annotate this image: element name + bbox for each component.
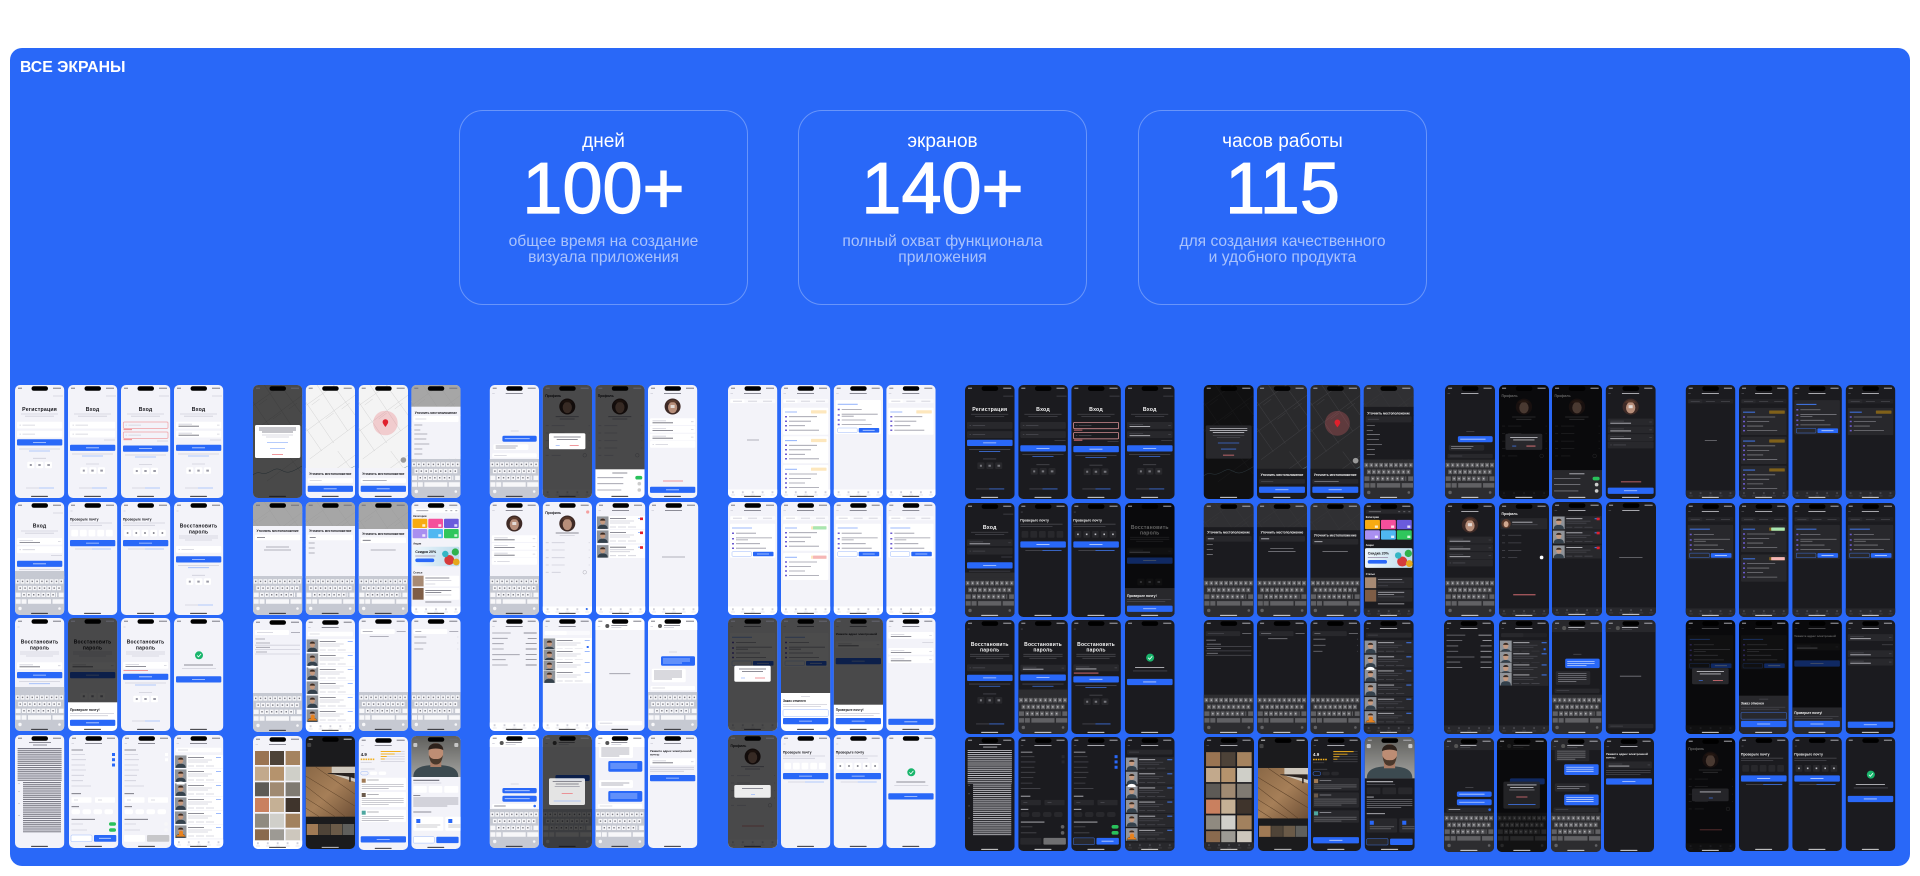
screen: profile: [1499, 503, 1549, 617]
screen: password dialog: [1686, 738, 1735, 852]
screen: login filled: [1125, 385, 1175, 499]
screen: email sheet: [1792, 620, 1842, 735]
screen group: light profile and chat screens: [490, 385, 698, 848]
screen: login keyboard: [965, 503, 1015, 617]
screen: orders empty: [1686, 385, 1735, 499]
screen: otp filled: [834, 735, 883, 848]
screen: orders list: [1739, 385, 1789, 499]
screen: gallery: [253, 736, 302, 849]
screen: restore keyboard: [15, 618, 64, 731]
screen: messages: [1499, 620, 1549, 734]
screen: master profile: [1365, 737, 1415, 851]
stat card: days: визуала приложения: [528, 249, 679, 266]
screen: masters list: [174, 735, 223, 848]
screen: master profile: [411, 736, 461, 849]
stat card: screens: [798, 110, 1087, 305]
screen: edit profile: [1606, 385, 1656, 499]
screen: login error: [1071, 385, 1121, 499]
screen: restore sheet: [1125, 503, 1175, 617]
screen: registration: [15, 385, 64, 498]
stat card: days: 100+: [522, 149, 685, 229]
screen: location suggestions: [304, 500, 364, 615]
screen: otp filled: [121, 502, 170, 615]
stat card: work hours: 115: [1225, 149, 1340, 229]
screen group: light orders screens: [728, 385, 936, 848]
screen: home: [411, 502, 461, 615]
screen: cancel dialog: [1686, 620, 1735, 734]
screen: email sheet: [834, 618, 883, 732]
screen: restore keyboard: [1018, 620, 1068, 734]
screen: chat conversation: [1552, 620, 1602, 734]
stat card: screens: приложения: [898, 249, 987, 266]
screen: order actions variant: [1792, 503, 1842, 617]
screen: restore sheet: [68, 618, 117, 731]
screen: search empty: [1257, 620, 1307, 734]
screen: change email: [648, 735, 697, 848]
screen: location suggestions: [1202, 501, 1263, 617]
screen: order actions variant: [886, 502, 936, 615]
screen: edit keyboard: [490, 502, 539, 615]
screen: home: [1364, 503, 1414, 617]
stat card: days: общее время на создание: [509, 233, 698, 250]
screen: reviews: [359, 737, 408, 850]
screen: change password: [1846, 620, 1895, 734]
screen: favourites: [1552, 502, 1602, 616]
screen: restore password: [174, 502, 223, 615]
screen: search recent: [253, 619, 302, 732]
screen: privacy policy: [15, 735, 64, 848]
screen: search recent: [1204, 620, 1254, 734]
screen: change email: [1604, 738, 1654, 852]
screen: location not found: [251, 500, 311, 615]
stat card: work hours: часов работы: [1222, 131, 1343, 152]
screen: location dialog: [1202, 383, 1263, 499]
screen: chat typing: [1444, 738, 1494, 852]
screen: map pin: [357, 383, 417, 498]
screen: gallery: [1204, 737, 1254, 851]
screen: photo viewer: [1258, 737, 1308, 851]
screen: chat keyboard: [490, 385, 539, 498]
screen: chat empty: [1606, 620, 1656, 734]
screen: map pin: [1308, 383, 1369, 499]
screen: restore error: [121, 618, 170, 731]
screen: notifications sheet: [595, 385, 645, 498]
screen: login: [68, 385, 117, 498]
screen: search empty: [359, 618, 408, 731]
screen: password dialog: [728, 735, 777, 848]
screen: masters: [1364, 620, 1414, 734]
screen: favourites: [596, 502, 645, 615]
screen: reviews: [1311, 737, 1361, 851]
stat card: screens: экранов: [907, 131, 978, 152]
screen: restore password: [965, 620, 1015, 734]
screen: search hints: [411, 618, 461, 731]
screen: one order: [886, 385, 936, 498]
screen: filters reset: [1018, 737, 1068, 851]
screen: chat keyboard: [1445, 385, 1495, 499]
screen: profile: [543, 502, 592, 615]
screen: order actions variant: [834, 502, 883, 615]
screen: long chat: [595, 735, 645, 848]
screen: map: [304, 383, 364, 498]
screen: orders mixed: [781, 502, 830, 615]
screen: chat empty: [595, 618, 645, 731]
screen: location list: [1362, 383, 1423, 499]
screen: chat typing: [490, 735, 539, 848]
screens gallery: [15, 385, 1896, 852]
stat card: days: [459, 110, 748, 305]
screen: messages: [543, 618, 592, 731]
screen: otp filled: [1071, 503, 1121, 617]
screen: orders list: [781, 385, 830, 498]
screen: favourites empty: [649, 502, 698, 615]
screen: orders empty: [728, 385, 777, 498]
screen group: dark orders screens: [1686, 385, 1895, 852]
screen group: dark location and search screens: [1202, 383, 1423, 851]
screen group: light auth screens: [15, 385, 223, 848]
stat card: screens: 140+: [861, 149, 1024, 229]
screen: location list: [409, 383, 469, 498]
screen: order detail: [1792, 385, 1842, 499]
screen: location dialog: [251, 383, 311, 498]
screen group: dark profile and chat screens: [1444, 385, 1656, 852]
screen: otp empty: [1018, 503, 1068, 617]
screen: masters: [306, 619, 355, 732]
screen: location not found: [1255, 501, 1316, 617]
screen: cancel dialog: [728, 618, 777, 731]
screen: login keyboard: [15, 502, 64, 615]
stat card: screens: полный охват функционала: [842, 233, 1043, 250]
screen: success: [1125, 620, 1175, 734]
screen: success: [1846, 737, 1895, 851]
screen: one order: [1846, 385, 1895, 499]
screen: chat conversation: [648, 618, 697, 731]
screen: prices: [1444, 620, 1494, 734]
screen: edit keyboard: [1445, 503, 1495, 617]
screen: notifications sheet: [1552, 385, 1602, 499]
screen: location empty: [357, 500, 417, 615]
screen: photo viewer: [306, 736, 355, 849]
screen: otp empty: [68, 502, 117, 615]
stat card: work hours: [1138, 110, 1427, 305]
screen: orders mixed: [1739, 503, 1789, 617]
stat card: work hours: и удобного продукта: [1209, 249, 1356, 266]
screen: login: [1018, 385, 1068, 499]
screen: masters list: [1125, 737, 1175, 851]
screen: login error: [121, 385, 170, 498]
screen: filters active: [1071, 737, 1121, 851]
screen: login filled: [174, 385, 223, 498]
screen: filters active: [69, 735, 118, 848]
screen: order actions variant: [1846, 503, 1895, 617]
heading: all screens: ВСЕ ЭКРАНЫ: [20, 59, 125, 76]
screen: order detail: [834, 385, 883, 498]
screen: favourites empty: [1606, 502, 1656, 616]
screen: otp empty: [781, 735, 830, 848]
screen: location empty: [1308, 501, 1369, 617]
stat card: days: дней: [582, 131, 625, 152]
screen: logout dialog: [1499, 385, 1549, 499]
screen: order actions: [728, 502, 777, 615]
screen group: dark auth screens: [965, 385, 1175, 851]
screen: long chat: [1551, 738, 1601, 852]
screen: success: [174, 618, 223, 731]
screen group: light location and search screens: [251, 383, 469, 850]
screen: message dialog: [543, 735, 592, 848]
screen: order cancelled sheet: [781, 618, 830, 731]
screen: order actions: [1686, 503, 1735, 617]
stat card: work hours: для создания качественного: [1179, 233, 1386, 250]
screen: otp empty: [1739, 737, 1789, 851]
screen: privacy policy: [965, 737, 1015, 851]
screen: change password: [886, 618, 936, 731]
screen: logout dialog: [543, 385, 592, 498]
screen: map: [1255, 383, 1316, 499]
screen: message dialog: [1497, 738, 1547, 852]
screen: prices: [490, 618, 539, 731]
screen: edit profile: [648, 385, 697, 498]
screen: restore error: [1071, 620, 1121, 734]
screen: otp filled: [1792, 737, 1842, 851]
screen: order cancelled sheet: [1739, 620, 1789, 734]
screen: registration: [965, 385, 1015, 499]
screen: filters reset: [122, 735, 171, 848]
screen: success: [886, 735, 936, 848]
screen: search hints: [1310, 620, 1360, 734]
